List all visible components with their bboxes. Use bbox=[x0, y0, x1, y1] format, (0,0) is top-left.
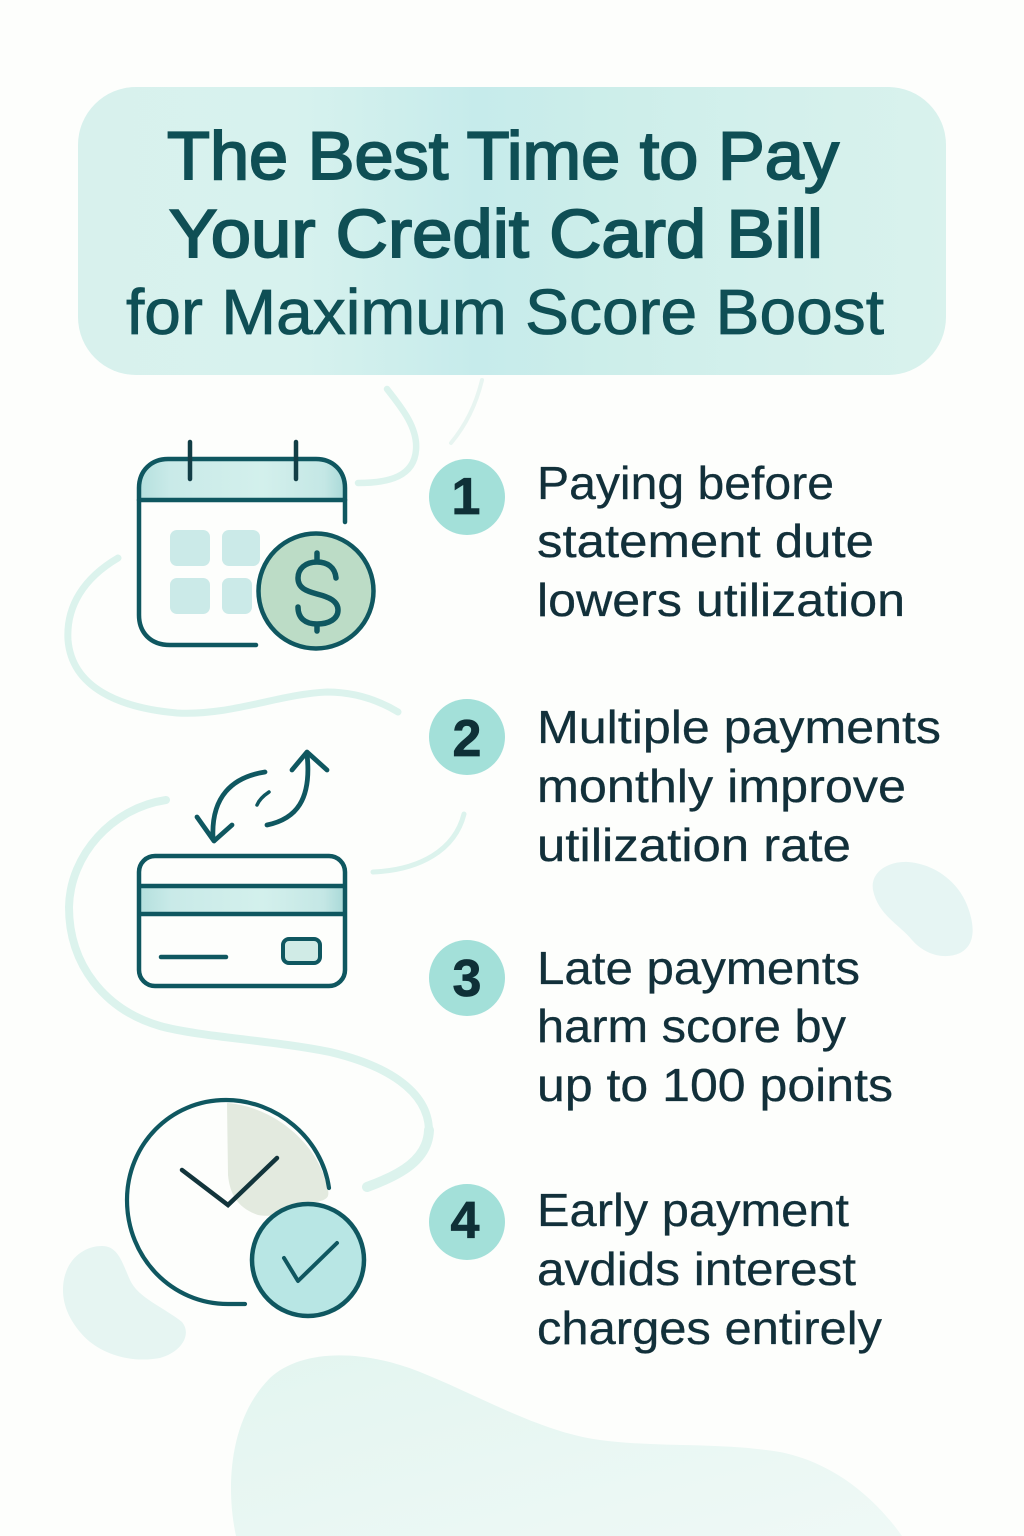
step 1: 1 bbox=[452, 468, 480, 526]
step 1 text bbox=[537, 457, 905, 626]
background blob: lower left bbox=[63, 1246, 186, 1360]
connector: card to step 2 bbox=[373, 814, 464, 872]
step 3 text: Late payments bbox=[537, 942, 860, 994]
step 4 text: avdids interest bbox=[537, 1243, 856, 1295]
connector: long curve to step 4 bbox=[69, 800, 429, 1187]
step 2 text: Multiple payments bbox=[537, 701, 941, 753]
step 2: 2 bbox=[453, 710, 481, 768]
step 3 text: up to 100 points bbox=[537, 1059, 893, 1111]
step 4: 4 bbox=[451, 1192, 480, 1250]
step 1 text: lowers utilization bbox=[537, 574, 905, 626]
connector: calendar to step 2 bbox=[68, 558, 398, 713]
step 2 bbox=[429, 699, 941, 871]
step 4 text: Early payment bbox=[537, 1184, 849, 1236]
step 1 bbox=[429, 457, 905, 626]
icon: card chip bbox=[283, 939, 320, 963]
title: main heading: Your Credit Card Bill bbox=[169, 196, 823, 272]
step 4 bbox=[429, 1184, 882, 1354]
step 3: 3 bbox=[453, 950, 481, 1008]
step 2 text: utilization rate bbox=[537, 819, 851, 871]
step 1 text: Paying before bbox=[537, 457, 834, 509]
step 3 text bbox=[537, 942, 893, 1111]
step 4 text: charges entirely bbox=[537, 1302, 882, 1354]
background blob: bottom bbox=[231, 1355, 902, 1536]
icon: calendar with dollar coin bbox=[139, 442, 374, 648]
connector: top curves bbox=[358, 380, 482, 483]
step 2 text bbox=[537, 701, 941, 871]
icon: dollar coin bbox=[258, 534, 374, 648]
step 3 text: harm score by bbox=[537, 1000, 846, 1052]
title: main heading: The Best Time to Pay bbox=[167, 118, 839, 194]
subtitle: for Maximum Score Boost bbox=[126, 276, 884, 348]
step 1 text: statement dute bbox=[537, 515, 874, 567]
step 4 text bbox=[537, 1184, 882, 1354]
step 2 text: monthly improve bbox=[537, 760, 906, 812]
panel: title banner bbox=[78, 87, 946, 375]
icon: exchange arrows bbox=[197, 752, 327, 841]
icon: credit card bbox=[139, 856, 345, 986]
title: main heading bbox=[167, 118, 839, 272]
background blob: right bbox=[873, 862, 973, 956]
icon: clock with check badge bbox=[127, 1100, 364, 1316]
icon: check badge bbox=[252, 1204, 364, 1316]
step 3 bbox=[429, 940, 893, 1111]
